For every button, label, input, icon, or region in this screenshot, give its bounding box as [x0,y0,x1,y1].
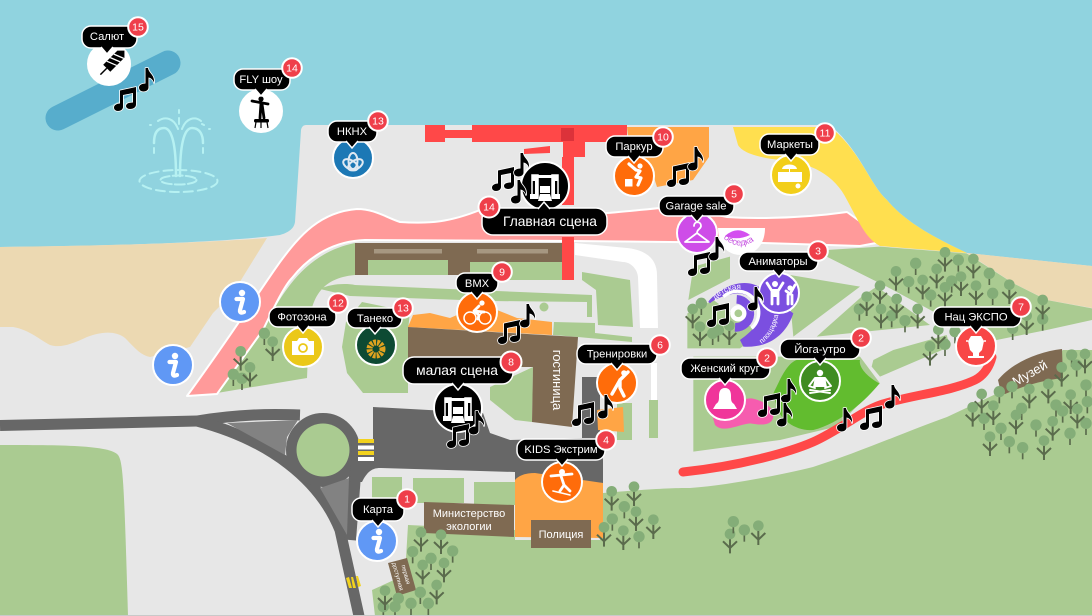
marker: Танеко 13 [347,298,413,365]
label: Карта [363,504,394,516]
building: ministry: Министерство [433,508,505,520]
beach west [0,238,267,357]
marker: Главная сцена 14 [478,162,607,235]
badge: 3 [815,246,821,258]
marker: Нац ЭКСПО 7 [933,297,1031,366]
green areas [0,243,1092,616]
trees: west lawn [228,328,280,390]
label: Garage sale [666,200,726,212]
marker: FLY шоу 14 [234,58,302,132]
badge: 1 [404,494,410,506]
road islands [227,420,349,535]
badge: 13 [372,116,384,128]
marker: Маркеты 11 [760,123,835,195]
kids playground: площадка [760,314,778,344]
kids extreme zone [515,473,603,538]
icon: triquetra [341,153,365,173]
label: Паркур [615,141,653,153]
trees: east forest [686,247,1092,460]
badge: 14 [483,202,495,214]
land base [0,125,1092,616]
marker: Garage sale 5 [659,184,744,253]
icon: family [767,281,795,304]
label: BMX [465,278,490,290]
label: FLY шоу [239,74,283,86]
icon: fountain [140,110,218,192]
marker: BMX 9 [456,262,512,332]
hotel: гостиница [550,350,565,411]
badge: 8 [508,356,514,368]
car park [350,377,603,483]
badge: 10 [657,132,669,144]
kids playground: детская [714,284,740,301]
icon: rocket [97,47,128,78]
white walkway [575,243,658,328]
marker: info west [220,282,260,322]
badge: 4 [603,434,609,446]
main stage structure red [425,125,627,280]
badge: 7 [1018,302,1024,314]
water ride path [58,63,168,118]
badge: 5 [731,188,737,200]
badge: 14 [286,62,298,74]
trees: south forest [378,481,660,616]
marker: KIDS Экстрим 4 [517,430,616,502]
label: Главная сцена [503,214,597,229]
museum [998,349,1063,394]
marker: info shore [153,345,193,385]
label: Маркеты [767,139,813,151]
top building [355,243,562,275]
badge: 12 [332,298,344,310]
building: police: Полиция [539,529,583,541]
marker: Аниматоры 3 [739,241,828,313]
label: НКНХ [337,126,368,138]
label: Фотозона [277,312,327,324]
badge: 13 [397,302,409,314]
badge: 9 [499,266,505,278]
roundabout centre [296,424,350,476]
training zone [597,407,624,432]
marker: Паркур 10 [606,127,673,196]
sign: first aid access [388,558,416,596]
museum: Музей [1010,357,1050,389]
hotel [408,327,578,427]
crosswalks [346,439,374,588]
zone: yoga [773,360,879,430]
building: police [531,520,591,548]
yellow beach zone [733,127,967,253]
label: малая сцена [416,363,498,378]
icon: info [374,529,382,552]
roads [0,415,359,616]
icon: flyboard [252,96,269,128]
parkour zone [627,127,709,187]
icon: woman [713,388,737,409]
marker: Женский круг 2 [681,348,777,420]
icon: market cart [778,164,802,188]
icon: cyclist [464,300,491,324]
marker: Тренировки 6 [577,335,670,403]
promenade pink [187,208,876,396]
marker: Фотозона 12 [269,293,348,367]
marker: малая сцена 8 [403,352,522,432]
label: Салют [90,31,124,43]
badge: 2 [858,332,864,344]
run track red [683,357,992,472]
building: ministry: экологии [446,521,492,533]
sign: first aid access: первая [400,564,410,585]
icon: yoga [809,370,831,393]
icon: sunflower [370,342,382,356]
label: Танеко [357,313,393,325]
icon: stretching [612,370,628,396]
label: Йога-утро [794,343,846,356]
marker: Карта 1 [352,489,417,561]
gazebo [718,228,765,255]
sign: first aid access: доступная [390,562,404,591]
marker: Салют 15 [82,17,148,85]
marker: НКНХ 13 [328,111,388,178]
badge: 6 [657,340,663,352]
label: KIDS Экстрим [524,444,598,456]
badge: 15 [132,22,144,34]
icon: stage [530,175,560,201]
icon: samovar [966,336,986,358]
BMX zone [408,310,552,335]
zone: women [712,398,773,429]
icon: camera [292,338,314,355]
gazebo: беседка [724,234,754,248]
icon: parkour [625,163,643,186]
beach east [967,253,1092,308]
icon: stage [443,398,473,423]
label: Аниматоры [748,256,808,268]
building: ministry [424,502,514,537]
badge: 2 [764,352,770,364]
music notes [114,68,900,448]
label: Женский круг [690,363,760,375]
kids playground [708,283,794,347]
trees: south lawn [723,516,765,553]
marker: Йога-утро 2 [780,328,871,401]
icon: skater [551,469,572,495]
label: Тренировки [587,348,647,360]
label: Нац ЭКСПО [944,312,1008,324]
icon: hanger [685,222,709,242]
bottom edge line [0,615,1092,616]
badge: 11 [820,128,831,140]
